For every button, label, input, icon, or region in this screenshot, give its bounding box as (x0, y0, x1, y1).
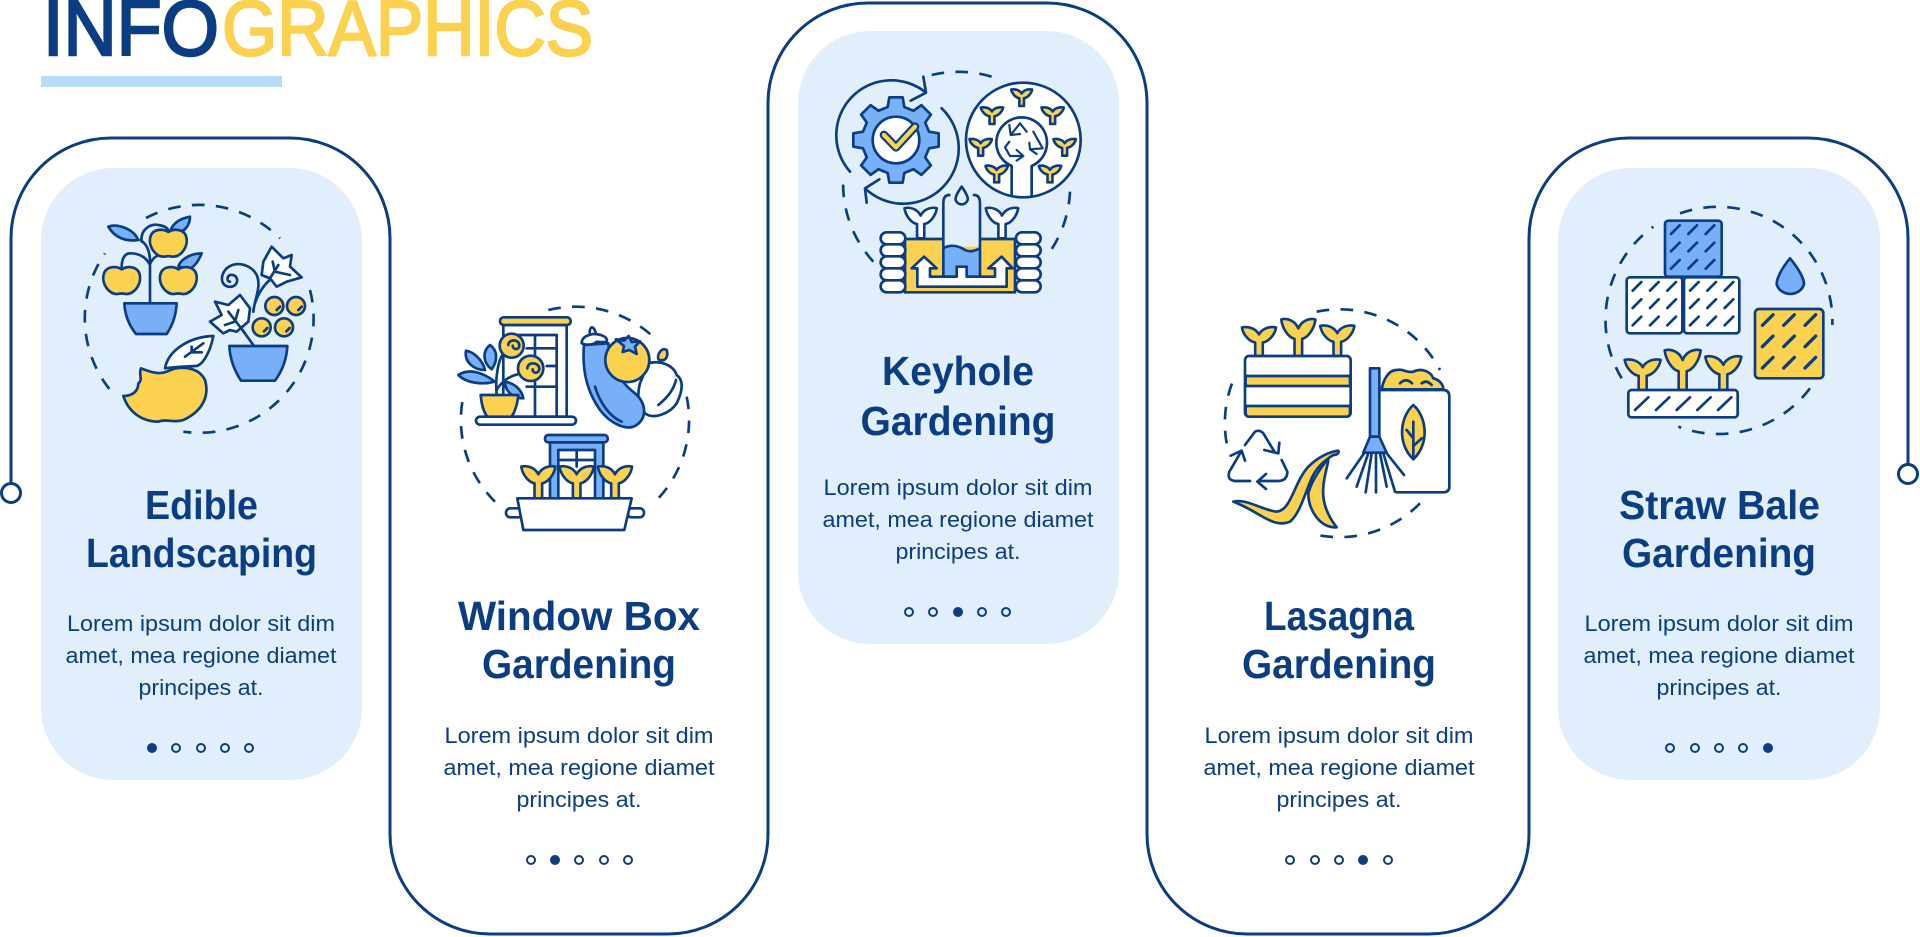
body text: principes at. (138, 675, 264, 700)
body text: Lorem ipsum dolor sit dim (1584, 611, 1854, 636)
pagination dots (1666, 744, 1772, 752)
heading: Gardening (482, 641, 676, 687)
body text (444, 723, 714, 812)
title (41, 0, 593, 87)
icon: straw bales, water drop and sprouts (1605, 207, 1832, 434)
heading (860, 348, 1056, 444)
pagination dots (905, 608, 1010, 616)
heading: Straw Bale (1619, 482, 1820, 528)
icon: gear, recycling tree and keyhole bed (836, 72, 1081, 292)
body text: amet, mea regione diamet (1584, 643, 1854, 668)
body text: amet, mea regione diamet (66, 643, 336, 668)
heading (86, 482, 317, 576)
panel: keyhole gardening (822, 72, 1094, 616)
panel: straw bale gardening (1584, 207, 1854, 752)
icon: fruit plants and apple (85, 205, 314, 433)
heading (1619, 482, 1820, 576)
body text (1204, 723, 1474, 812)
heading: Window Box (458, 593, 700, 639)
body text: Lorem ipsum dolor sit dim (824, 475, 1092, 500)
panel: window box gardening (444, 307, 714, 864)
heading: Gardening (1242, 641, 1436, 687)
heading: Gardening (860, 398, 1056, 444)
body text: principes at. (1656, 675, 1782, 700)
pagination dots (527, 856, 632, 864)
body text (822, 475, 1094, 564)
icon: window plants and vegetables (458, 307, 689, 530)
end ring (1898, 464, 1918, 484)
body text (66, 611, 336, 700)
body text (1584, 611, 1854, 700)
body text: amet, mea regione diamet (1204, 755, 1474, 780)
icon: layered bed, rake, compost and banana peel (1225, 309, 1449, 537)
body text: principes at. (516, 787, 642, 812)
panel: edible landscaping (66, 205, 336, 752)
body text: Lorem ipsum dolor sit dim (1204, 723, 1474, 748)
start ring (2, 484, 20, 502)
body text: Lorem ipsum dolor sit dim (67, 611, 335, 636)
heading: Edible (145, 482, 258, 528)
heading: Gardening (1622, 530, 1816, 576)
heading: Keyhole (882, 348, 1034, 394)
heading: Landscaping (86, 530, 317, 576)
heading (458, 593, 700, 687)
panel backgrounds group (41, 31, 1880, 780)
pagination dots (1286, 856, 1392, 864)
body text: Lorem ipsum dolor sit dim (444, 723, 714, 748)
heading (1242, 593, 1436, 687)
body text: amet, mea regione diamet (444, 755, 714, 780)
pagination dots (148, 744, 253, 752)
body text: principes at. (896, 539, 1020, 564)
heading: Lasagna (1264, 593, 1415, 639)
panel: lasagna gardening (1204, 309, 1474, 864)
body text: principes at. (1276, 787, 1402, 812)
body text: amet, mea regione diamet (822, 507, 1094, 532)
